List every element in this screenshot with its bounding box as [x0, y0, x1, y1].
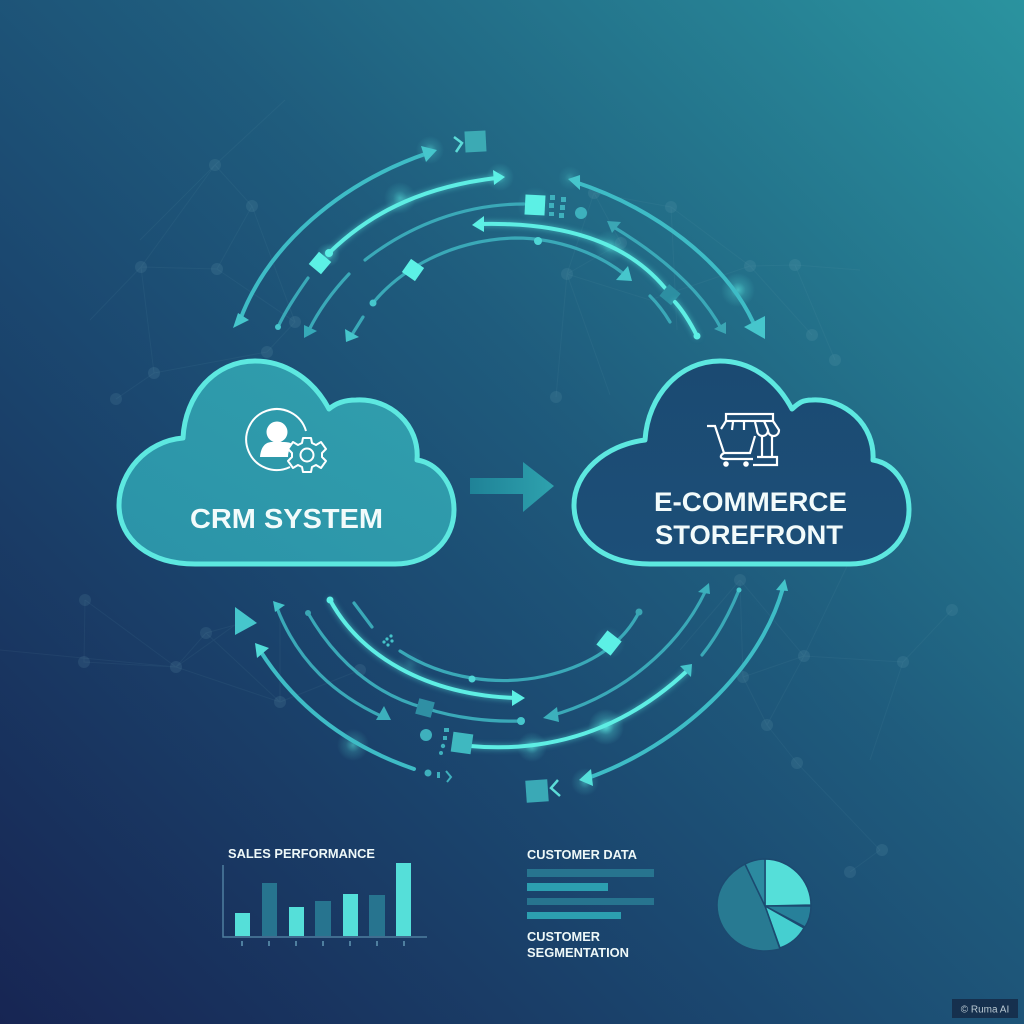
panel: e-commerce cloud [574, 361, 909, 564]
glow highlights [316, 136, 755, 307]
panel: customer data [527, 847, 654, 960]
panel: e-commerce cloud: STOREFRONT [655, 520, 844, 550]
arc: left double arrow [273, 601, 391, 720]
arc: bright right-to-left arrow [472, 216, 665, 288]
watermark [952, 999, 1018, 1018]
arc: bright arrow [326, 596, 525, 706]
arc segment with dot end [275, 278, 308, 330]
arc: right second double arrow [607, 221, 726, 334]
bottom data flow arcs [235, 579, 788, 803]
triangle marker [235, 607, 257, 635]
top data flow arcs [233, 130, 765, 342]
packet: square and chevron [525, 779, 560, 803]
storefront label: E-COMMERCE [654, 487, 847, 517]
chart: sales performance [223, 846, 427, 946]
diamond node [659, 284, 681, 305]
chart: segmentation pie [717, 859, 811, 951]
arc: bright segment with dot [675, 302, 700, 340]
arc: bright lower with square [451, 664, 692, 754]
arc: bright left arrow [309, 170, 505, 274]
panel: CRM cloud [119, 361, 454, 564]
dotted data cluster [420, 728, 451, 782]
arc: square connector [365, 194, 546, 260]
glow highlights [337, 627, 625, 796]
customer data heading: CUSTOMER DATA [527, 847, 638, 862]
chart title: SALES PERFORMANCE [228, 846, 375, 861]
arc: outer left arrow [255, 643, 414, 769]
short dash [650, 296, 670, 322]
horizontal bars [527, 869, 654, 919]
customer segmentation label: CUSTOMER [527, 929, 601, 944]
tick marks [241, 941, 405, 946]
customer segmentation label: SEGMENTATION [527, 945, 629, 960]
arc segment with arrow [304, 274, 349, 338]
axes [223, 865, 427, 937]
icon: user with gear [246, 409, 326, 472]
inner short arrow [345, 317, 363, 342]
icon: shopping cart and storefront [707, 414, 779, 467]
arc: inner with dot and diamond [370, 237, 632, 306]
arc: outer right double arrow [579, 579, 788, 786]
short dash and dots [354, 603, 394, 647]
dotted data cluster [549, 195, 587, 219]
arc: with square node and dots [305, 610, 525, 725]
arc: smile with diamond [400, 608, 642, 682]
background network pattern [0, 100, 958, 878]
arrow: CRM to storefront [470, 462, 554, 512]
short segment with dot [702, 588, 742, 655]
arc: right double arrow [543, 583, 710, 722]
watermark: © Ruma AI [961, 1004, 1009, 1016]
arc: outer right double arrow [568, 175, 765, 339]
packet: square and chevron [454, 130, 487, 153]
arc: outer left double arrow [233, 146, 437, 328]
bars [235, 863, 411, 936]
CRM label: CRM SYSTEM [190, 503, 383, 534]
